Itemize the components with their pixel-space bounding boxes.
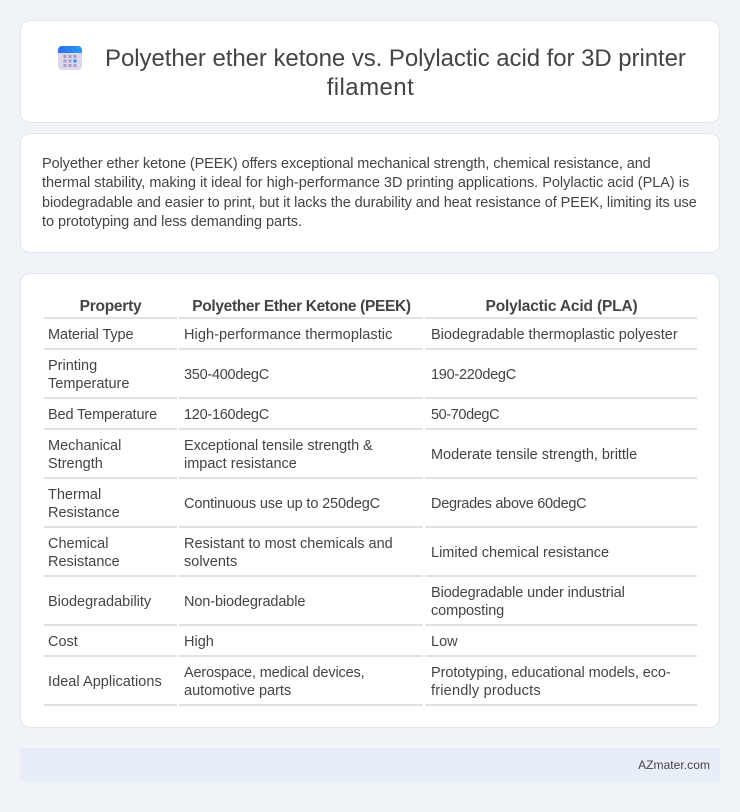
- row: biodegradability: [48, 585, 625, 619]
- row: printing temperature: Printing: [48, 358, 97, 374]
- row: thermal resistance: Thermal: [48, 487, 101, 503]
- row: mechanical strength: Mechanical: [48, 438, 121, 454]
- row: ideal applications: friendly products: [431, 683, 541, 699]
- table header: Property: [80, 298, 141, 315]
- summary text: biodegradable and easier to print, but it lacks the durability and heat resistance of PEEK, limiting its use: [42, 195, 697, 211]
- row: biodegradability: Biodegradability: [48, 594, 151, 610]
- row: chemical resistance: Chemical: [48, 536, 108, 552]
- row: chemical resistance: solvents: [184, 554, 237, 570]
- row: mechanical strength: Exceptional tensile strength &: [184, 438, 373, 454]
- row: cost: Low: [431, 634, 458, 650]
- row: ideal applications: [48, 665, 671, 699]
- row: bed temperature: Bed Temperature: [48, 407, 157, 423]
- icon: calendar: [58, 46, 82, 70]
- row: printing temperature: 350-400degC: [184, 367, 269, 383]
- row: ideal applications: Prototyping, educational models, eco-: [431, 665, 671, 681]
- row: mechanical strength: Strength: [48, 456, 103, 472]
- row: printing temperature: [48, 358, 516, 392]
- row: biodegradability: Non-biodegradable: [184, 594, 305, 610]
- comparison table: [44, 298, 697, 706]
- title: [105, 45, 686, 101]
- row: mechanical strength: Moderate tensile strength, brittle: [431, 447, 637, 463]
- row: thermal resistance: Continuous use up to 250degC: [184, 496, 380, 512]
- row: material type: High-performance thermoplastic: [184, 327, 392, 343]
- row: mechanical strength: [48, 438, 637, 472]
- row: thermal resistance: Resistance: [48, 505, 120, 521]
- row: mechanical strength: impact resistance: [184, 456, 297, 472]
- row: cost: High: [184, 634, 214, 650]
- row: material type: [48, 327, 678, 343]
- row: material type: Material Type: [48, 327, 133, 343]
- row: ideal applications: Aerospace, medical devices,: [184, 665, 365, 681]
- row: cost: Cost: [48, 634, 78, 650]
- row: biodegradability: composting: [431, 603, 504, 619]
- row: chemical resistance: [48, 536, 609, 570]
- row: bed temperature: 50-70degC: [431, 407, 499, 423]
- title: Polyether ether ketone vs. Polylactic acid for 3D printer: [105, 45, 686, 72]
- footer source text: AZmater.com: [638, 758, 710, 772]
- summary text: thermal stability, making it ideal for high-performance 3D printing applications. Polylactic acid (PLA) is: [42, 175, 689, 191]
- table header: Polylactic Acid (PLA): [486, 298, 637, 315]
- row: biodegradability: Biodegradable under industrial: [431, 585, 625, 601]
- summary text: Polyether ether ketone (PEEK) offers exceptional mechanical strength, chemical resistance, and: [42, 156, 651, 172]
- row: printing temperature: 190-220degC: [431, 367, 516, 383]
- footer bar: [20, 748, 720, 782]
- summary text: [42, 156, 697, 230]
- summary text: to prototyping and less demanding parts.: [42, 214, 302, 230]
- row: thermal resistance: [48, 487, 586, 521]
- row: bed temperature: [48, 407, 499, 423]
- row: thermal resistance: Degrades above 60degC: [431, 496, 586, 512]
- row: ideal applications: Ideal Applications: [48, 674, 162, 690]
- title: filament: [327, 74, 414, 101]
- table header: Polyether Ether Ketone (PEEK): [192, 298, 411, 315]
- row: chemical resistance: Limited chemical resistance: [431, 545, 609, 561]
- row: material type: Biodegradable thermoplastic polyester: [431, 327, 678, 343]
- row: chemical resistance: Resistant to most chemicals and: [184, 536, 393, 552]
- row: cost: [48, 634, 458, 650]
- panel: comparison table card: [20, 273, 720, 728]
- panel: title card: [20, 20, 720, 123]
- row: ideal applications: automotive parts: [184, 683, 291, 699]
- row: chemical resistance: Resistance: [48, 554, 120, 570]
- row: bed temperature: 120-160degC: [184, 407, 269, 423]
- row: printing temperature: Temperature: [48, 376, 129, 392]
- table header: [80, 298, 637, 315]
- panel: summary card: [20, 133, 720, 253]
